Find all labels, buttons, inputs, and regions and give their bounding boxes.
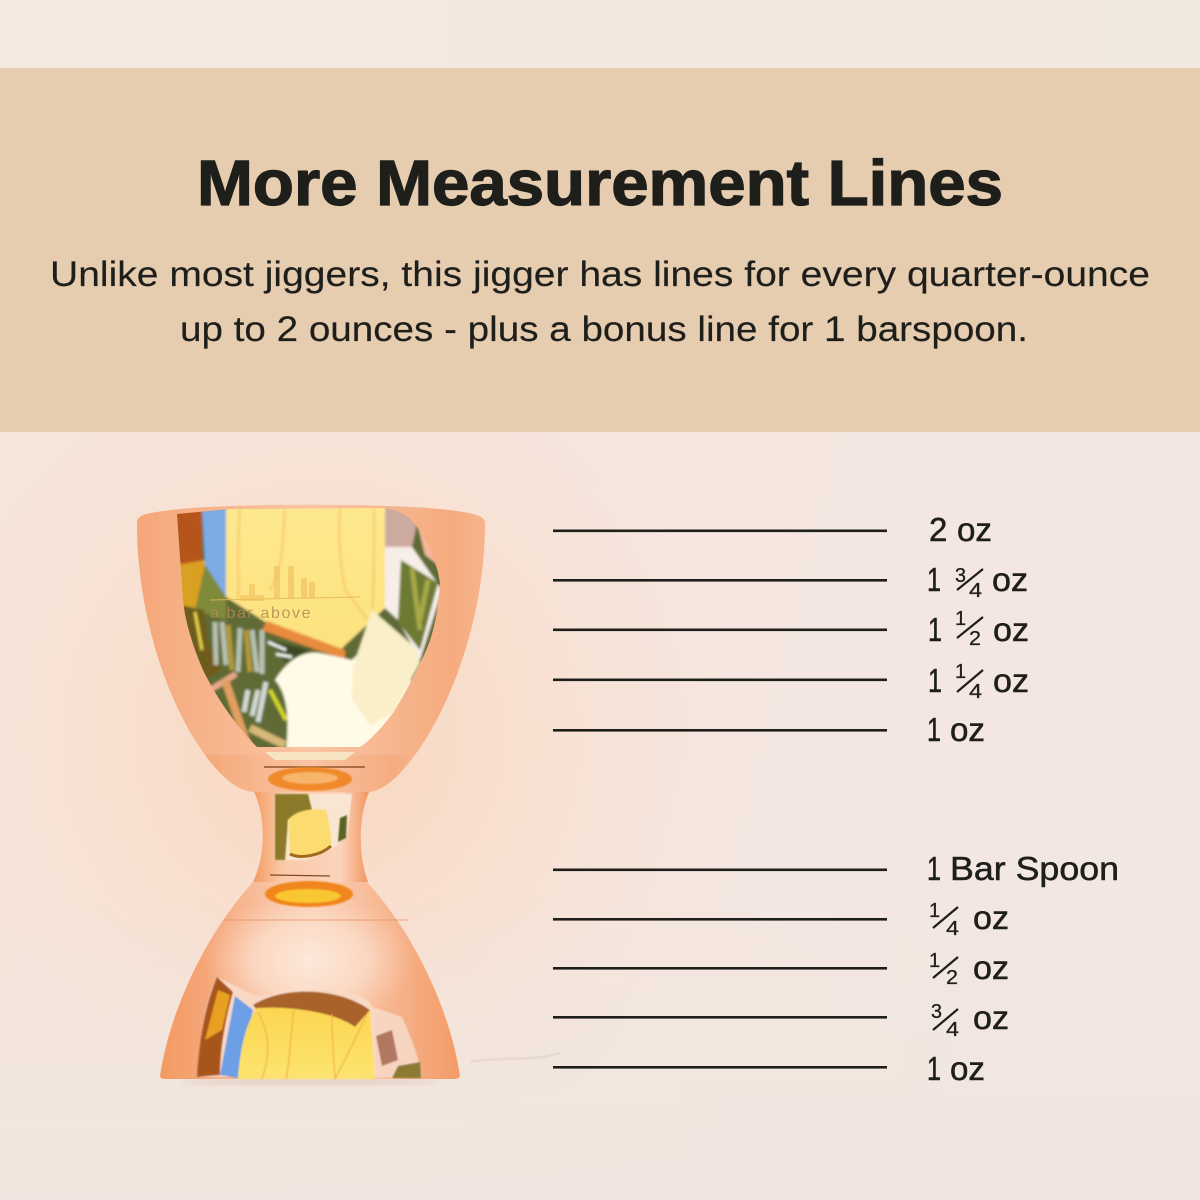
measurement labels: large side: oz (950, 711, 985, 748)
measurement labels: large side: oz (993, 611, 1029, 648)
jigger shadow (180, 1079, 440, 1085)
measurement labels: small side (927, 850, 1119, 1087)
measurement labels: small side: oz (950, 1050, 985, 1087)
measurement labels: small side: oz (973, 999, 1009, 1036)
upper cup (137, 505, 485, 760)
measurement labels: small side: oz (973, 899, 1009, 936)
measurement lines: small side (553, 868, 887, 1069)
engraved logo: a bar above (210, 605, 312, 622)
measurement labels: small side: 1 (927, 850, 941, 887)
header band (0, 68, 1200, 432)
description text: Unlike most jiggers, this jigger has lines for every quarter-ounce (50, 255, 1150, 294)
measurement labels: large side: 2 (929, 511, 947, 548)
measurement labels: small side: Bar Spoon (950, 850, 1119, 887)
upper collar (205, 752, 415, 792)
measurement labels: large side: 4 (969, 580, 982, 602)
measurement labels: large side: 1 (927, 561, 941, 598)
measurement labels: small side: 4 (946, 918, 959, 940)
reflected foliage streaks (215, 622, 262, 674)
measurement labels: large side (927, 511, 1029, 748)
measurement labels: small side: 4 (946, 1019, 959, 1041)
reflected ceiling (226, 505, 385, 650)
measurement labels: small side: 2 (946, 967, 958, 989)
jigger illustration (137, 505, 485, 1085)
measurement labels: small side: oz (973, 949, 1009, 986)
lower dome cup (160, 882, 460, 1079)
measurement labels: large side: 2 (969, 628, 981, 650)
cup reflection (177, 508, 440, 747)
measurement labels: large side: 4 (969, 681, 982, 703)
measurement labels: large side: 1 (928, 662, 942, 699)
dome reflection (197, 977, 421, 1079)
neck (253, 790, 370, 882)
measurement labels: small side: 1 (929, 950, 940, 972)
measurement labels: large side: 1 (955, 608, 966, 630)
lower collar reflection (265, 881, 353, 907)
measurement labels: large side: 1 (955, 661, 966, 683)
measurement labels: large side: 3 (955, 565, 966, 587)
description text: up to 2 ounces - plus a bonus line for 1 barspoon. (180, 310, 1028, 349)
measurement labels: small side: 3 (931, 1001, 942, 1023)
description text (50, 255, 1150, 349)
measurement lines: large side (553, 530, 887, 732)
measurement labels: large side: oz (957, 511, 992, 548)
measurement labels: large side: oz (992, 561, 1028, 598)
measurement labels: large side: 1 (927, 711, 941, 748)
measurement labels: large side: 1 (928, 611, 942, 648)
engraved logo (210, 566, 360, 622)
title: More Measurement Lines (197, 147, 1003, 219)
measurement labels: small side: 1 (929, 900, 940, 922)
measurement labels: small side: 1 (927, 1050, 941, 1087)
measurement labels: large side: oz (993, 662, 1029, 699)
